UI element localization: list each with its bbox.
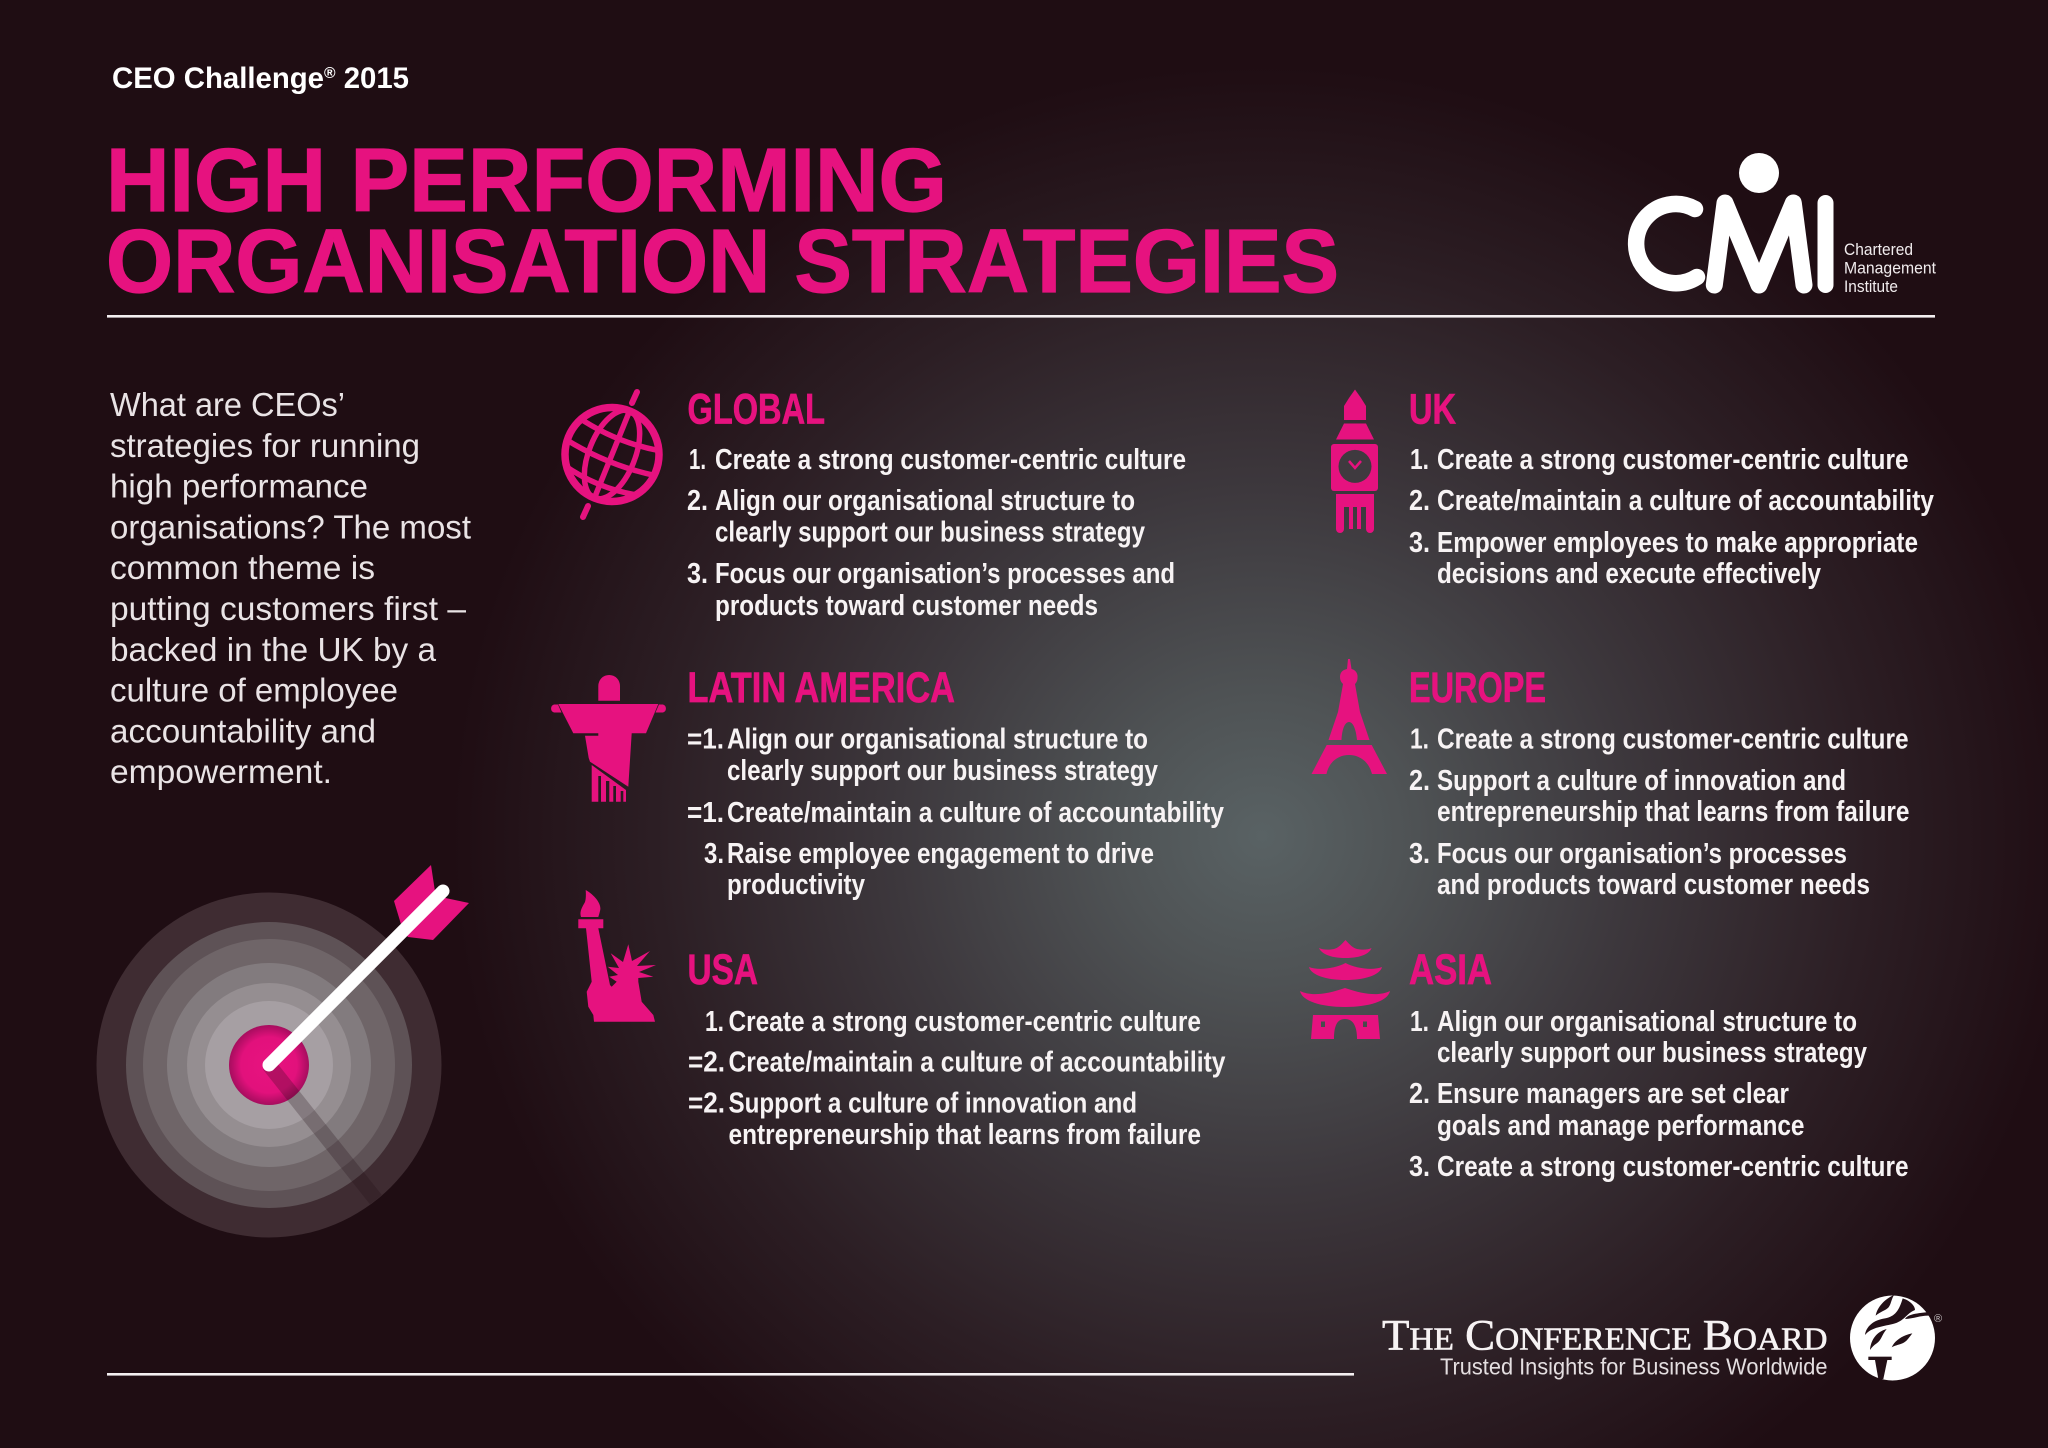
heading: Asia: ASIA (1409, 946, 1492, 994)
list: UK strategies: 1. (1410, 444, 1429, 476)
list: UK strategies: 2. (1409, 485, 1430, 517)
list: Latin America strategies: Align our organisational structure to (727, 724, 1148, 756)
logo: The Conference Board: ® (1934, 1313, 1942, 1325)
list: UK strategies: 3. (1409, 527, 1430, 559)
list: UK strategies: Create/maintain a culture of accountability (1437, 485, 1934, 517)
list: UK strategies: Create a strong customer-centric culture (1437, 444, 1908, 476)
intro text: backed in the UK by a (110, 631, 437, 668)
list: Latin America strategies: =1. (687, 797, 724, 829)
list: Global strategies: Create a strong customer-centric culture (715, 444, 1186, 476)
list: Europe strategies: 1. (1410, 724, 1429, 756)
list: Latin America strategies (687, 724, 1224, 901)
list: UK strategies: decisions and execute effectively (1437, 558, 1821, 590)
title: ORGANISATION STRATEGIES (106, 212, 1339, 312)
intro text: putting customers first – (110, 590, 467, 627)
icon: pagoda (1300, 940, 1390, 1039)
intro text: empowerment. (110, 753, 332, 790)
list: Asia strategies: Align our organisational structure to (1437, 1006, 1857, 1038)
list: Asia strategies: 3. (1409, 1151, 1430, 1183)
logo: The Conference Board (1382, 1295, 1942, 1380)
heading: UK: UK (1409, 386, 1456, 434)
icon: target with arrow (96, 865, 469, 1238)
logo: The Conference Board: THE CONFERENCE BOARD (1382, 1312, 1828, 1360)
logo: Chartered Management Institute (1636, 153, 1936, 296)
icon: globe (561, 389, 663, 520)
list: USA strategies: Create/maintain a culture of accountability (728, 1046, 1226, 1078)
list: USA strategies: entrepreneurship that learns from failure (728, 1119, 1201, 1151)
list: Global strategies: Align our organisational structure to (715, 485, 1135, 517)
heading: USA: USA (688, 946, 758, 994)
list: Asia strategies: 1. (1410, 1006, 1429, 1038)
list: Asia strategies: 2. (1409, 1078, 1430, 1110)
list: Latin America strategies: clearly support our business strategy (727, 755, 1158, 787)
list: Europe strategies (1409, 724, 1910, 901)
list: USA strategies: =2. (688, 1046, 725, 1078)
list: Global strategies: 1. (689, 444, 706, 476)
list: Europe strategies: and products toward customer needs (1437, 869, 1870, 901)
list: Global strategies: 2. (687, 485, 708, 517)
logo: The Conference Board: Trusted Insights for Business Worldwide (1440, 1354, 1828, 1380)
title (106, 131, 1339, 312)
list: Asia strategies: Ensure managers are set clear (1437, 1078, 1789, 1110)
intro text: organisations? The most (110, 508, 471, 545)
logo: Chartered Management Institute: Institute (1844, 278, 1898, 296)
list: UK strategies (1409, 444, 1934, 590)
icon: Big Ben (1331, 390, 1378, 533)
list: USA strategies: Support a culture of innovation and (728, 1088, 1137, 1120)
logo: Chartered Management Institute: Management (1844, 260, 1936, 278)
panel: Global (548, 386, 1186, 622)
list: USA strategies: 1. (705, 1006, 724, 1038)
list: USA strategies: =2. (688, 1088, 725, 1120)
intro text (110, 386, 471, 790)
kicker: CEO Challenge 2015: ® (324, 65, 336, 82)
list: Asia strategies (1409, 1006, 1908, 1183)
panel: UK (1331, 386, 1934, 590)
intro text: strategies for running (110, 427, 420, 464)
list: Europe strategies: Support a culture of innovation and (1437, 765, 1846, 797)
heading: Europe: EUROPE (1409, 664, 1546, 712)
list: Europe strategies: Focus our organisation’s processes (1437, 838, 1847, 870)
panel: Europe (1312, 659, 1910, 901)
intro text: accountability and (110, 712, 376, 749)
intro text: common theme is (110, 549, 375, 586)
intro text: culture of employee (110, 672, 398, 709)
list: Latin America strategies: Create/maintain a culture of accountability (727, 797, 1224, 829)
list: Global strategies: products toward customer needs (715, 590, 1098, 622)
list: Europe strategies: entrepreneurship that learns from failure (1437, 796, 1910, 828)
list: Asia strategies: Create a strong customer-centric culture (1437, 1151, 1908, 1183)
list: Global strategies: Focus our organisation’s processes and (715, 558, 1175, 590)
list: UK strategies: Empower employees to make appropriate (1437, 527, 1918, 559)
icon: Christ the Redeemer (551, 675, 666, 802)
list: Europe strategies: 2. (1409, 765, 1430, 797)
list: Asia strategies: clearly support our business strategy (1437, 1037, 1867, 1069)
intro text: high performance (110, 468, 368, 505)
list: Latin America strategies: 3. (704, 838, 724, 870)
heading: Global: GLOBAL (688, 386, 825, 434)
list: Latin America strategies: =1. (687, 724, 724, 756)
list: USA strategies: Create a strong customer-centric culture (728, 1006, 1201, 1038)
title: HIGH PERFORMING (106, 131, 947, 231)
panel: Latin America (551, 664, 1224, 901)
icon: Eiffel Tower (1312, 659, 1387, 774)
intro text: What are CEOs’ (110, 386, 345, 423)
list: Europe strategies: 3. (1409, 838, 1430, 870)
list: Global strategies (687, 444, 1186, 622)
icon: Statue of Liberty (578, 890, 656, 1022)
logo: Chartered Management Institute: Chartered (1844, 241, 1913, 259)
panel: USA (578, 890, 1226, 1151)
list: Asia strategies: goals and manage performance (1437, 1110, 1804, 1142)
kicker: CEO Challenge 2015: CEO Challenge (112, 62, 329, 95)
list: Latin America strategies: Raise employee engagement to drive (727, 838, 1154, 870)
kicker: CEO Challenge 2015: 2015 (336, 62, 409, 95)
list: Latin America strategies: productivity (727, 869, 865, 901)
list: Europe strategies: Create a strong customer-centric culture (1437, 724, 1908, 756)
heading: Latin America: LATIN AMERICA (688, 664, 955, 712)
list: Global strategies: 3. (687, 558, 708, 590)
list: Global strategies: clearly support our business strategy (715, 516, 1145, 548)
panel: Asia (1300, 940, 1908, 1183)
list: USA strategies (688, 1006, 1226, 1151)
